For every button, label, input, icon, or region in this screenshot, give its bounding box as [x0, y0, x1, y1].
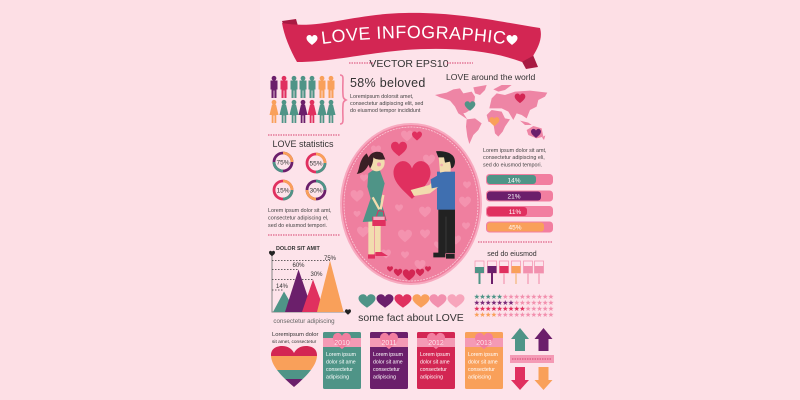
year card 2012: consectetur [420, 367, 447, 373]
year card 2011: Lorem ipsum [373, 352, 403, 358]
bottom heart row [387, 266, 431, 281]
big heart [394, 161, 430, 199]
bar labels: 45% [508, 224, 522, 232]
year card 2012: 2012 [428, 340, 444, 347]
stat: 58% beloved: Loremipsum dolorsit amet, [350, 94, 414, 100]
statistics text: sed do eiusmod tempori. [268, 223, 327, 229]
fact heading: some fact about LOVE [358, 312, 464, 324]
star rating rows [474, 294, 554, 318]
donut labels [276, 160, 323, 194]
man [411, 151, 455, 259]
stat: 58% beloved: 58% beloved [350, 76, 426, 90]
statistics text: Lorem ipsum dolor sit amt, [268, 208, 332, 214]
area chart: consectetur adipiscing [273, 318, 335, 325]
chart title: DOLOR SIT AMIT [276, 246, 321, 252]
subtitle: VECTOR EPS10 [369, 58, 449, 70]
striped heart text [272, 332, 318, 345]
year card 2013: Lorem ipsum [468, 352, 498, 358]
year card 2011: dolor sit ame [373, 360, 403, 366]
year card 2010: dolor sit ame [326, 360, 356, 366]
chart labels [276, 256, 337, 290]
statistics text: consectetur adipiscing el, [268, 216, 329, 222]
year card 2010: adipiscing [326, 374, 349, 380]
map hearts [465, 94, 541, 138]
year card 2010: consectetur [326, 367, 353, 373]
text block right: sed do eiusmod tempori. [483, 162, 542, 168]
donut labels: 30% [309, 188, 323, 194]
small hearts [391, 132, 422, 156]
striped heart text: sit amet, consectetur [272, 339, 317, 345]
striped heart [270, 345, 318, 388]
glasses heading: sed do eiusmod [487, 251, 537, 258]
central oval illustration [340, 123, 482, 285]
world map [435, 85, 547, 144]
striped heart text: Loremipsum dolor [272, 332, 318, 338]
bar labels [507, 178, 522, 232]
donut labels: 55% [309, 160, 323, 168]
bar labels: 11% [509, 209, 521, 216]
year card 2013: 2013 [476, 340, 492, 347]
stat: 58% beloved [350, 76, 426, 114]
arrows [510, 328, 554, 390]
year card 2013: consectetur [468, 367, 495, 373]
bar labels: 21% [507, 194, 521, 200]
poster background [260, 0, 560, 400]
year card 2011: consectetur [373, 367, 400, 373]
stat: 58% beloved: consectetur adipiscing elit, sed [350, 101, 423, 107]
year card 2011: adipiscing [373, 374, 396, 380]
icon: banner hearts [306, 35, 518, 45]
people pictogram [270, 76, 336, 123]
chart labels: 30% [310, 272, 323, 278]
map heading: LOVE around the world [446, 72, 536, 82]
year card 2013: adipiscing [468, 374, 491, 380]
woman [357, 152, 388, 259]
text block right [483, 148, 547, 168]
bar labels: 14% [507, 178, 521, 184]
title banner [282, 12, 541, 69]
background hearts [350, 131, 471, 270]
chart labels: 60% [292, 263, 305, 269]
year card 2010: Lorem ipsum [326, 352, 356, 358]
text block right: Lorem ipsum dolor sit amt, [483, 148, 547, 154]
year card 2011 [370, 332, 408, 389]
wine glasses [475, 261, 544, 284]
colored hearts row [358, 294, 464, 308]
donut charts [274, 153, 325, 199]
area chart [269, 246, 351, 325]
brace [340, 75, 346, 124]
year card 2012: Lorem ipsum [420, 352, 450, 358]
progress bars [486, 174, 553, 232]
chart labels: 14% [276, 284, 289, 290]
subtitle [349, 58, 473, 70]
statistics text [268, 208, 332, 229]
text block right: consectetur adipiscing eli, [483, 155, 545, 161]
statistics heading: LOVE statistics [272, 139, 334, 149]
year card 2010: 2010 [334, 340, 350, 347]
chart labels: 75% [324, 256, 337, 262]
year card 2010 [323, 332, 361, 389]
donut labels: 15% [276, 188, 290, 194]
year card 2013: dolor sit ame [468, 360, 498, 366]
year card 2012: dolor sit ame [420, 360, 450, 366]
year card 2012 [417, 332, 455, 389]
year card 2012: adipiscing [420, 374, 443, 380]
year card 2011: 2011 [381, 340, 397, 347]
year card 2013 [465, 332, 503, 389]
donut labels: 75% [276, 160, 290, 166]
stat: 58% beloved: do eiusmod tempor incididunt [350, 108, 421, 114]
